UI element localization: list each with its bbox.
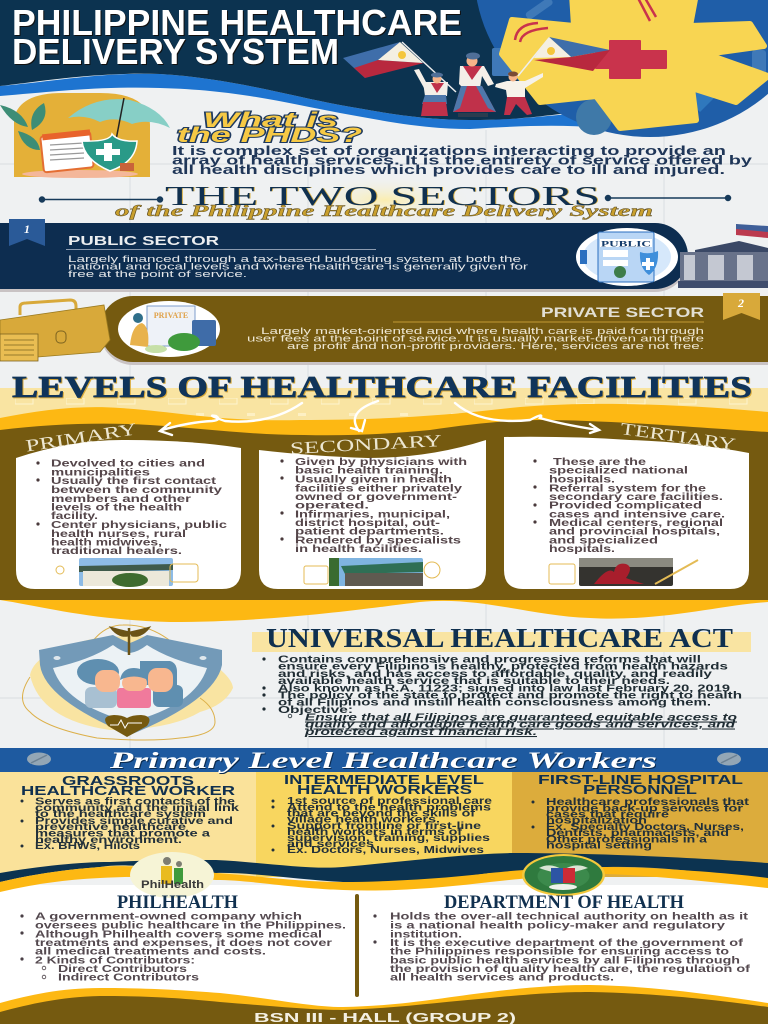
boy bbox=[495, 72, 543, 115]
list: Usually the first contact bbox=[51, 475, 217, 487]
list bbox=[36, 458, 227, 557]
universal healthcare act text: of all Filipinos and instill health consciousness among them. bbox=[278, 696, 711, 708]
private sector heading: PRIVATE SECTOR bbox=[541, 304, 704, 320]
ribbon 1: 1 bbox=[24, 222, 30, 236]
shield body bbox=[39, 635, 222, 735]
column: intermediate: and services bbox=[287, 839, 375, 850]
list: traditional healers. bbox=[51, 545, 182, 557]
department of health text: Holds the over-all technical authority on health as it bbox=[390, 910, 749, 922]
department of health text: the Philippines responsible for ensuring access to bbox=[390, 946, 729, 958]
illustration: insurance umbrella and clipboard bbox=[0, 93, 170, 178]
list: Devolved to cities and bbox=[51, 458, 205, 470]
column: first-line: Other professionals in a bbox=[546, 834, 708, 846]
list: These are the bbox=[553, 456, 646, 468]
ribbon 1 bbox=[9, 219, 45, 246]
philhealth text: Although Philhealth covers some medical bbox=[35, 928, 322, 940]
column: intermediate: INTERMEDIATE LEVEL bbox=[284, 772, 484, 787]
heading: What is the PHDS bbox=[177, 109, 362, 147]
heading: What is the PHDS: What is bbox=[203, 109, 338, 132]
header banner bbox=[0, 0, 768, 137]
yellow blob bbox=[30, 636, 233, 730]
blue circle bbox=[474, 0, 768, 137]
department of health text: is a national health policy-maker and regulatory bbox=[390, 919, 725, 931]
label: SECONDARY bbox=[290, 431, 442, 458]
list: between the community bbox=[51, 484, 222, 496]
heading: the two sectors: THE TWO SECTORS bbox=[165, 181, 600, 211]
icon: briefcase bbox=[0, 300, 110, 361]
philhealth text: all medical treatments and costs. bbox=[35, 945, 266, 957]
column: grassroots: to the healthcare system bbox=[35, 809, 206, 820]
label: PRIMARY bbox=[24, 419, 138, 456]
list: health nurses, rural bbox=[51, 528, 186, 540]
column: grassroots: Ex. BHWs, Hilots bbox=[35, 841, 141, 852]
ribbon 2 bbox=[723, 293, 760, 320]
icon: public document bbox=[576, 228, 678, 286]
list: in health facilities. bbox=[295, 543, 422, 555]
universal healthcare act text: available health service that is suitable to their needs. bbox=[278, 675, 670, 687]
public sector text bbox=[68, 254, 528, 280]
navy header background bbox=[0, 0, 620, 120]
list: facility. bbox=[51, 510, 98, 522]
universal healthcare act text: The policy of the state to protect and promote the right to health bbox=[278, 690, 742, 702]
department of health text: institution. bbox=[390, 928, 462, 940]
woman bbox=[453, 52, 496, 117]
ribbon 2: 2 bbox=[737, 296, 744, 310]
panel: philhealth and department of health bbox=[0, 852, 768, 1024]
column: grassroots: Serves as first contacts of the bbox=[35, 796, 236, 808]
list: specialized national bbox=[549, 465, 688, 477]
public sector text: national and local levels and where health care is generally given for bbox=[68, 262, 528, 272]
universal healthcare act text: quality and affordable health care goods and services, and bbox=[305, 718, 736, 730]
list: Infirmaries, municipal, bbox=[295, 509, 450, 521]
column: first-line: provide back-up services for bbox=[546, 804, 743, 814]
column: intermediate: 1st source of professional care bbox=[287, 796, 493, 807]
card: tertiary bbox=[504, 419, 749, 589]
list: levels of the health bbox=[51, 502, 182, 514]
column: intermediate bbox=[272, 772, 493, 856]
universal healthcare act text: Contains comprehensive and progressive reforms that will bbox=[278, 654, 701, 666]
girl bbox=[414, 69, 448, 116]
list: and provincial hospitals, bbox=[549, 526, 720, 538]
icon: private document: PRIVATE bbox=[154, 311, 188, 320]
leaves bbox=[0, 103, 46, 150]
list: Usually given in health bbox=[295, 473, 452, 485]
heart bbox=[105, 715, 149, 737]
list bbox=[280, 456, 467, 555]
column: grassroots: GRASSROOTS bbox=[62, 773, 194, 788]
list bbox=[533, 456, 725, 555]
column: intermediate: village health workers. bbox=[287, 814, 440, 826]
philhealth text: A government-owned company which bbox=[35, 910, 302, 922]
column backgrounds bbox=[0, 772, 257, 877]
philhealth text bbox=[20, 910, 346, 984]
list: hospitals. bbox=[549, 473, 615, 485]
umbrella bbox=[68, 99, 170, 128]
left flag bbox=[343, 42, 456, 92]
icon: right pill bbox=[717, 752, 741, 766]
intro paragraph: all health disciplines which provides care to ill and injured. bbox=[172, 163, 725, 177]
card: secondary bbox=[259, 431, 486, 589]
column: grassroots: Provides simple curative and bbox=[35, 816, 233, 827]
caduceus bbox=[110, 627, 150, 655]
intro paragraph: array of health services. It is the entirety of service offered by bbox=[172, 154, 752, 168]
icon: public document: PUBLIC bbox=[601, 240, 651, 248]
gold wave bbox=[0, 866, 768, 892]
photo: heart center bbox=[549, 558, 698, 586]
list: district hospital, out- bbox=[295, 517, 441, 529]
column: intermediate: Ex. Doctors, Nurses, Midwives bbox=[287, 845, 485, 856]
column: grassroots: community and the initial link bbox=[35, 803, 240, 814]
title bbox=[12, 2, 462, 72]
column: first-line: hospital setting bbox=[546, 840, 652, 852]
title: DELIVERY SYSTEM bbox=[12, 31, 339, 72]
list: health midwives, bbox=[51, 536, 162, 548]
public sector heading: PUBLIC SECTOR bbox=[68, 233, 220, 248]
column: first-line: Healthcare professionals that bbox=[546, 797, 750, 808]
list: Given by physicians with bbox=[295, 456, 467, 468]
list: Rendered by specialists bbox=[295, 534, 461, 546]
list: members and other bbox=[51, 493, 191, 505]
heading: universal healthcare act: UNIVERSAL HEALTHCARE ACT bbox=[266, 623, 733, 653]
philhealth text: 2 Kinds of Contributors: bbox=[35, 954, 195, 966]
panel: levels of healthcare facilities bbox=[0, 369, 768, 622]
public sector text: free at the point of service. bbox=[68, 269, 247, 280]
logo: department of health seal bbox=[522, 854, 605, 896]
brown panel bbox=[0, 420, 768, 600]
people with flags bbox=[343, 37, 610, 117]
column: intermediate: health workers in terms of bbox=[287, 827, 463, 838]
heading: What is the PHDS: the PHDS? bbox=[177, 124, 362, 147]
department of health text: basic public health services by all Filipinos through bbox=[390, 954, 740, 966]
universal healthcare act text: ensure every Filipino is healthy, protected from health hazards bbox=[278, 660, 728, 672]
column: grassroots: measures that promote a bbox=[35, 828, 211, 840]
heading: the two sectors bbox=[40, 175, 730, 225]
public sector text: Largely financed through a tax-based budgeting system at both the bbox=[68, 254, 521, 265]
banner title: Primary Level Healthcare Workers bbox=[108, 748, 657, 773]
navy wave bbox=[0, 853, 768, 883]
column: grassroots: healthy environment. bbox=[35, 835, 182, 846]
philhealth text: treatments and expenses, it does not cover bbox=[35, 937, 332, 949]
universal healthcare act text: protected against financial risk. bbox=[304, 726, 537, 738]
photo: district hospital bbox=[304, 558, 440, 586]
column: first-line: PERSONNEL bbox=[583, 782, 697, 797]
heading: the two sectors: of the Philippine Healthcare Delivery System bbox=[115, 203, 653, 220]
list: patient departments. bbox=[295, 526, 444, 538]
private sector text: Largely market-oriented and where health care is paid for through bbox=[261, 326, 704, 337]
clipboard bbox=[40, 131, 94, 172]
philhealth text: Direct Contributors bbox=[58, 963, 187, 975]
list: owned or government- bbox=[295, 491, 458, 503]
private sector text: user fees at the point of service. It is usually market-driven and there bbox=[247, 334, 704, 344]
heading: levels of healthcare facilities: LEVELS OF HEALTHCARE FACILITIES bbox=[12, 369, 752, 404]
gold wave bbox=[0, 404, 768, 622]
intro paragraph bbox=[172, 144, 752, 177]
column: intermediate: Attend to the health problems bbox=[287, 802, 492, 814]
list: Provided complicated bbox=[549, 500, 702, 512]
column: intermediate: Support frontline or first-line bbox=[287, 821, 482, 832]
philhealth heading: PHILHEALTH bbox=[117, 892, 238, 913]
right flag bbox=[518, 37, 610, 76]
footer bbox=[0, 985, 768, 1024]
yellow medical star bbox=[502, 0, 768, 128]
list: facilities either privately bbox=[295, 482, 462, 494]
illustration: universal healthcare shield bbox=[22, 625, 233, 740]
column: first-line: Dentists, pharmacists, and bbox=[546, 828, 729, 839]
red cross bbox=[596, 41, 666, 78]
list: hospitals. bbox=[549, 543, 615, 555]
list: Referral system for the bbox=[549, 482, 706, 494]
department of health heading: DEPARTMENT OF HEALTH bbox=[444, 892, 684, 913]
panel: public sector bbox=[0, 219, 768, 292]
list: cases and intensive care. bbox=[549, 508, 725, 520]
title: PHILIPPINE HEALTHCARE bbox=[12, 2, 462, 43]
logo: philhealth bbox=[130, 852, 214, 898]
pale yellow backdrop bbox=[0, 388, 768, 430]
gold outline bbox=[22, 625, 215, 740]
list: operated. bbox=[295, 500, 369, 512]
gold wave bbox=[0, 985, 768, 1024]
department of health text: the provision of quality health care, the regulation of bbox=[390, 963, 751, 975]
private sector text bbox=[247, 326, 704, 352]
universal healthcare act text: Ensure that all Filipinos are guaranteed equitable access to bbox=[305, 712, 738, 724]
arrows bbox=[160, 401, 599, 435]
universal healthcare act text: and risks, and has access to affordable, quality, and readily bbox=[278, 668, 712, 680]
list: basic health training. bbox=[295, 465, 443, 477]
icon: left pill bbox=[27, 752, 51, 766]
faded medical icons bbox=[492, 0, 766, 135]
panel: private sector bbox=[0, 293, 768, 365]
column: first-line: cases that require bbox=[546, 810, 670, 820]
card: primary bbox=[16, 419, 241, 589]
universal healthcare act text: Objective: bbox=[278, 704, 353, 716]
column: first-line: Ex. Specialty Doctors, Nurses, bbox=[546, 822, 744, 833]
divider bbox=[355, 894, 359, 997]
column: grassroots: HEALTHCARE WORKER bbox=[21, 783, 236, 798]
column: first-line: hospitalization bbox=[546, 816, 647, 826]
blue wave band bbox=[0, 74, 600, 129]
column: grassroots: preventive healthcare bbox=[35, 822, 187, 833]
universal healthcare act text bbox=[262, 654, 742, 738]
list: Medical centers, regional bbox=[549, 517, 723, 529]
column: intermediate: HEALTH WORKERS bbox=[297, 782, 472, 797]
column: first-line bbox=[532, 772, 750, 852]
list: and specialized bbox=[549, 534, 658, 546]
brown wave bbox=[0, 992, 768, 1024]
universal healthcare act text: Also known as R.A. 11223; signed into law last February 20, 2019 bbox=[278, 682, 730, 694]
shield bbox=[82, 134, 137, 171]
list: Center physicians, public bbox=[51, 519, 227, 531]
column: intermediate: supervision, training, supplies bbox=[287, 833, 491, 844]
column: grassroots bbox=[20, 773, 240, 852]
list: municipalities bbox=[51, 466, 150, 478]
column: intermediate: that are beyond the skills of bbox=[287, 808, 476, 820]
philhealth text: oversees public healthcare in the Philippines. bbox=[35, 919, 346, 931]
label: TERTIARY bbox=[619, 419, 737, 454]
logo: philhealth: PhilHealth bbox=[141, 879, 204, 891]
department of health text: all health services and products. bbox=[390, 972, 614, 984]
panel: primary level healthcare workers bbox=[0, 748, 768, 877]
family bbox=[77, 659, 183, 708]
white background bbox=[0, 885, 768, 1024]
private sector text: are profit and non-profit providers. Here, services are not free. bbox=[287, 341, 704, 352]
list: secondary care facilities. bbox=[549, 491, 723, 503]
philhealth text: Indirect Contributors bbox=[58, 972, 199, 984]
icon: private document bbox=[118, 301, 220, 357]
blue banner bbox=[0, 748, 768, 772]
column: first-line: FIRST-LINE HOSPITAL bbox=[538, 772, 743, 787]
intro paragraph: It is complex set of organizations interacting to provide an bbox=[172, 144, 726, 158]
icon: government building bbox=[678, 224, 768, 288]
department of health text bbox=[373, 910, 751, 984]
photo: rural health unit bbox=[56, 558, 198, 587]
department of health text: It is the executive department of the government of bbox=[390, 937, 744, 949]
